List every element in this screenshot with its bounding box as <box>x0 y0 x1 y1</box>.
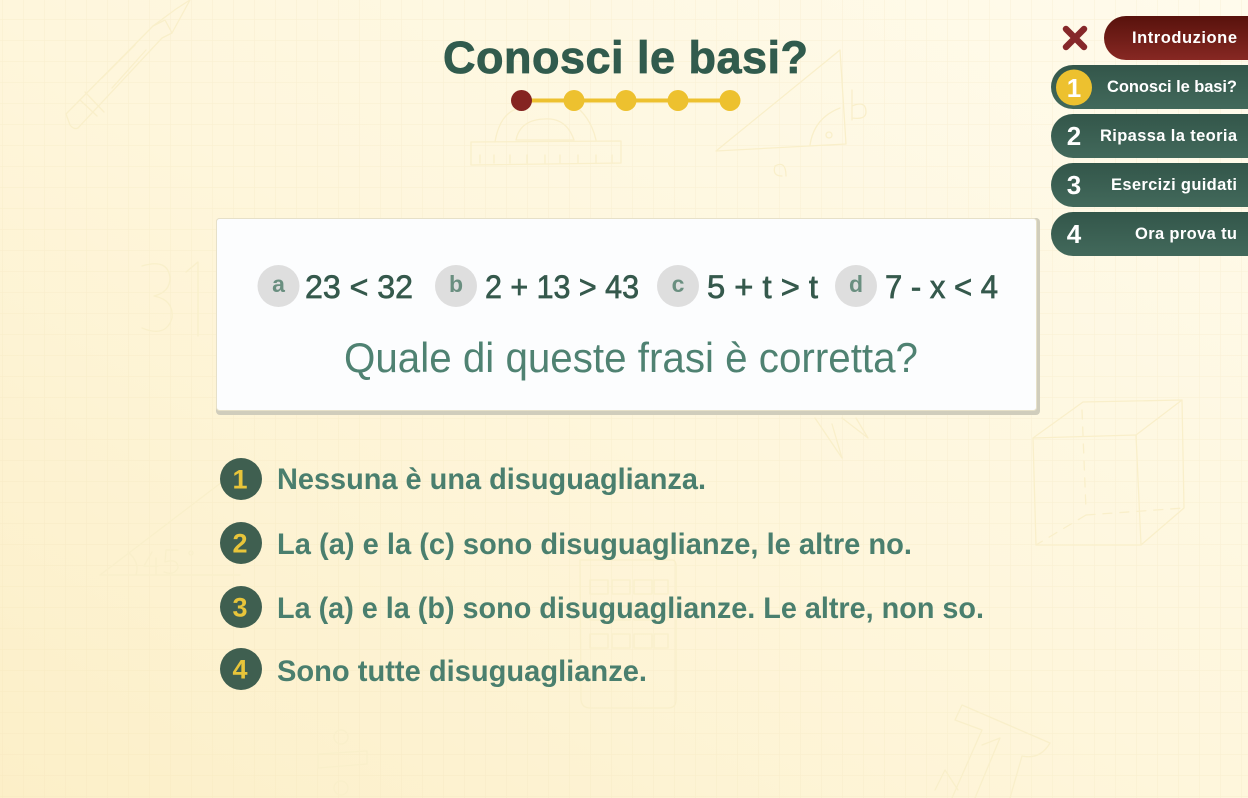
answer 4 <box>220 648 647 690</box>
nav button: 4 Ora prova tu <box>1051 212 1248 256</box>
option c <box>657 265 818 307</box>
option b <box>435 265 639 307</box>
nav button: 4 Ora prova tu: Ora prova tu <box>1135 225 1237 243</box>
progress indicator <box>511 90 740 111</box>
answer 1 <box>220 458 706 500</box>
question text: Quale di queste frasi è corretta? <box>344 334 918 381</box>
background sketch: triangle 45 degrees <box>100 482 240 575</box>
option b: b <box>449 271 463 297</box>
nav button: 4 Ora prova tu: 4 <box>1067 219 1082 249</box>
background sketch: pencil <box>66 0 190 129</box>
option a: 23 < 32 <box>305 269 413 305</box>
title: Conosci le basi? <box>443 32 808 83</box>
answer 4: Sono tutte disuguaglianze. <box>277 655 647 688</box>
answer 3: 3 <box>232 592 248 622</box>
background sketch: calculator <box>580 560 676 708</box>
nav button: 1 Conosci le basi?: 1 <box>1067 73 1081 103</box>
answer 1: 1 <box>232 464 248 494</box>
nav button: 2 Ripassa la teoria <box>1051 114 1248 158</box>
panel: question card <box>216 218 1040 415</box>
background sketch: protractor and ruler <box>471 108 621 165</box>
answer 2: 2 <box>232 528 248 558</box>
nav button: 2 Ripassa la teoria: 2 <box>1067 121 1081 151</box>
answer 2: La (a) e la (c) sono disuguaglianze, le altre no. <box>277 528 912 561</box>
option d <box>835 265 998 307</box>
nav button: 1 Conosci le basi?: Conosci le basi? <box>1107 78 1237 96</box>
icon: close <box>1066 29 1084 47</box>
background sketch: numbers <box>142 262 198 336</box>
background sketch: pi symbol <box>935 705 1050 798</box>
nav button: 3 Esercizi guidati: 3 <box>1067 170 1081 200</box>
nav button: Introduzione: Introduzione <box>1132 29 1237 47</box>
background sketch: set square <box>716 50 866 176</box>
background sketch: cube <box>1033 400 1184 545</box>
nav button: 3 Esercizi guidati: Esercizi guidati <box>1111 176 1237 194</box>
option d: d <box>849 271 863 297</box>
option c: c <box>672 271 685 297</box>
option b: 2 + 13 > 43 <box>485 269 639 305</box>
nav button: 3 Esercizi guidati <box>1051 163 1248 207</box>
nav button: Introduzione <box>1104 16 1248 60</box>
option c: 5 + t > t <box>707 269 818 305</box>
answer 3: La (a) e la (b) sono disuguaglianze. Le altre, non so. <box>277 592 984 625</box>
answer 1: Nessuna è una disuguaglianza. <box>277 463 706 496</box>
option d: 7 - x < 4 <box>885 269 998 305</box>
nav button: 2 Ripassa la teoria: Ripassa la teoria <box>1100 127 1238 145</box>
option a <box>258 265 413 307</box>
nav button: 1 Conosci le basi? <box>1051 65 1248 109</box>
answer 4: 4 <box>232 654 248 684</box>
option a: a <box>272 271 285 297</box>
background sketch: division sign <box>318 730 367 795</box>
background sketch: pen <box>815 418 868 458</box>
